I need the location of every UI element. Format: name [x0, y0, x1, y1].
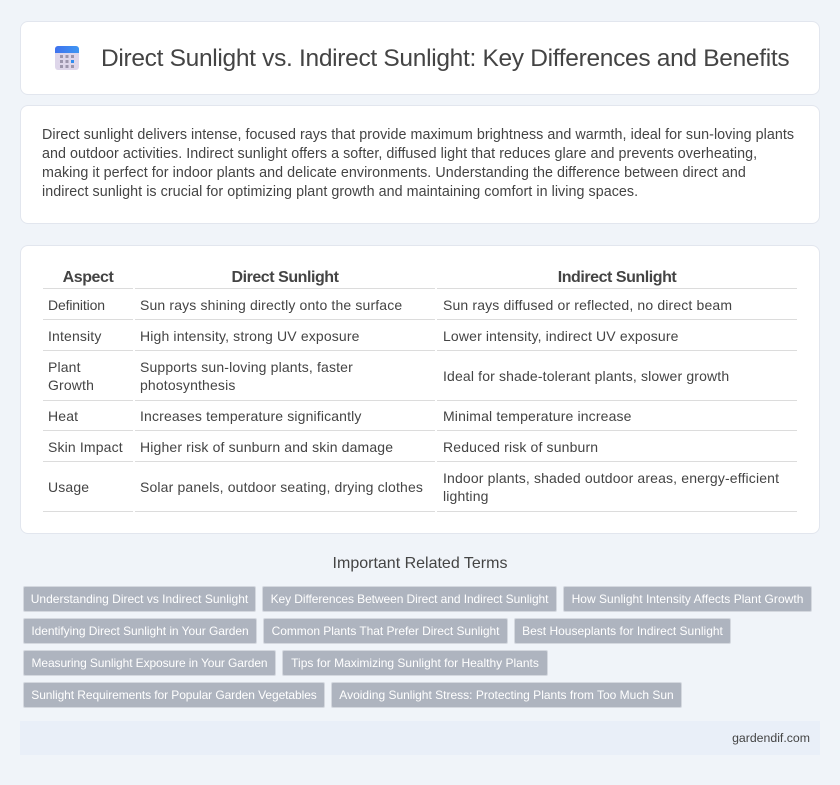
- tag: [23, 682, 325, 708]
- panel: header: [20, 21, 820, 95]
- title: Direct Sunlight vs. Indirect Sunlight: Key Differences and Benefits: [101, 45, 789, 72]
- row: skin impact: Higher risk of sunburn and skin damage: [140, 439, 393, 455]
- tag: [282, 650, 548, 676]
- panel: introduction text: indirect sunlight is crucial for optimizing plant growth and maintaining comfort in living spaces.: [42, 184, 638, 200]
- tag: [331, 682, 682, 708]
- footer source: gardendif.com: [732, 731, 810, 745]
- table header: Aspect: [63, 269, 113, 286]
- panel: introduction text: [20, 105, 820, 224]
- tag: Best Houseplants for Indirect Sunlight: [522, 624, 723, 638]
- row: skin impact: Skin Impact: [48, 439, 123, 455]
- row: intensity: Lower intensity, indirect UV exposure: [443, 328, 679, 344]
- row: intensity: [48, 328, 679, 344]
- tag: [23, 586, 256, 612]
- panel: comparison table: [20, 245, 820, 534]
- row: plant growth: photosynthesis: [140, 377, 236, 393]
- icon: calendar: [55, 46, 79, 70]
- tag: Understanding Direct vs Indirect Sunlight: [31, 592, 248, 606]
- row: heat: Minimal temperature increase: [443, 408, 632, 424]
- tag: [263, 618, 508, 644]
- tag: Tips for Maximizing Sunlight for Healthy Plants: [291, 656, 539, 670]
- row: heat: [48, 408, 632, 424]
- row: usage: Indoor plants, shaded outdoor areas, energy-efficient: [443, 470, 779, 486]
- tag: [262, 586, 557, 612]
- tag: How Sunlight Intensity Affects Plant Growth: [572, 592, 803, 606]
- tag: Key Differences Between Direct and Indirect Sunlight: [271, 592, 548, 606]
- tag: [23, 650, 276, 676]
- row: skin impact: Reduced risk of sunburn: [443, 439, 598, 455]
- row: plant growth: Supports sun-loving plants, faster: [140, 359, 353, 375]
- row: usage: lighting: [443, 488, 489, 504]
- tag: Identifying Direct Sunlight in Your Garden: [31, 624, 249, 638]
- row: skin impact: [48, 439, 598, 455]
- tag: Avoiding Sunlight Stress: Protecting Plants from Too Much Sun: [339, 688, 674, 702]
- row: usage: Usage: [48, 479, 89, 495]
- table header: Indirect Sunlight: [558, 269, 676, 286]
- row: definition: Definition: [48, 297, 105, 313]
- row: definition: [48, 297, 732, 313]
- table header: [63, 269, 676, 286]
- table header: Direct Sunlight: [231, 269, 339, 286]
- footer bar: [20, 721, 820, 755]
- tag: Sunlight Requirements for Popular Garden Vegetables: [31, 688, 317, 702]
- tag: [514, 618, 731, 644]
- row: plant growth: Growth: [48, 377, 94, 393]
- panel: introduction text: Direct sunlight delivers intense, focused rays that provide maximum brightness and warmth, ideal for sun-loving plants: [42, 127, 794, 143]
- panel: introduction text: and outdoor activities. Indirect sunlight offers a softer, diffused light that reduces glare and prevents overheating,: [42, 146, 757, 162]
- row: plant growth: Ideal for shade-tolerant plants, slower growth: [443, 368, 729, 384]
- row: heat: Increases temperature significantly: [140, 408, 362, 424]
- tag: [563, 586, 812, 612]
- row: intensity: Intensity: [48, 328, 102, 344]
- row: usage: [48, 470, 779, 504]
- row: definition: Sun rays diffused or reflected, no direct beam: [443, 297, 732, 313]
- panel: introduction text: making it perfect for indoor plants and delicate environments. Understanding the difference between direct and: [42, 165, 746, 181]
- tag: [23, 618, 257, 644]
- related term tags: [23, 586, 812, 708]
- row: definition: Sun rays shining directly onto the surface: [140, 297, 402, 313]
- row: intensity: High intensity, strong UV exposure: [140, 328, 360, 344]
- tag: Common Plants That Prefer Direct Sunlight: [272, 624, 499, 638]
- tag: Measuring Sunlight Exposure in Your Garden: [32, 656, 267, 670]
- row: plant growth: Plant: [48, 359, 81, 375]
- row: heat: Heat: [48, 408, 78, 424]
- heading: related terms: Important Related Terms: [333, 555, 507, 572]
- row: plant growth: [48, 359, 729, 393]
- row: usage: Solar panels, outdoor seating, drying clothes: [140, 479, 423, 495]
